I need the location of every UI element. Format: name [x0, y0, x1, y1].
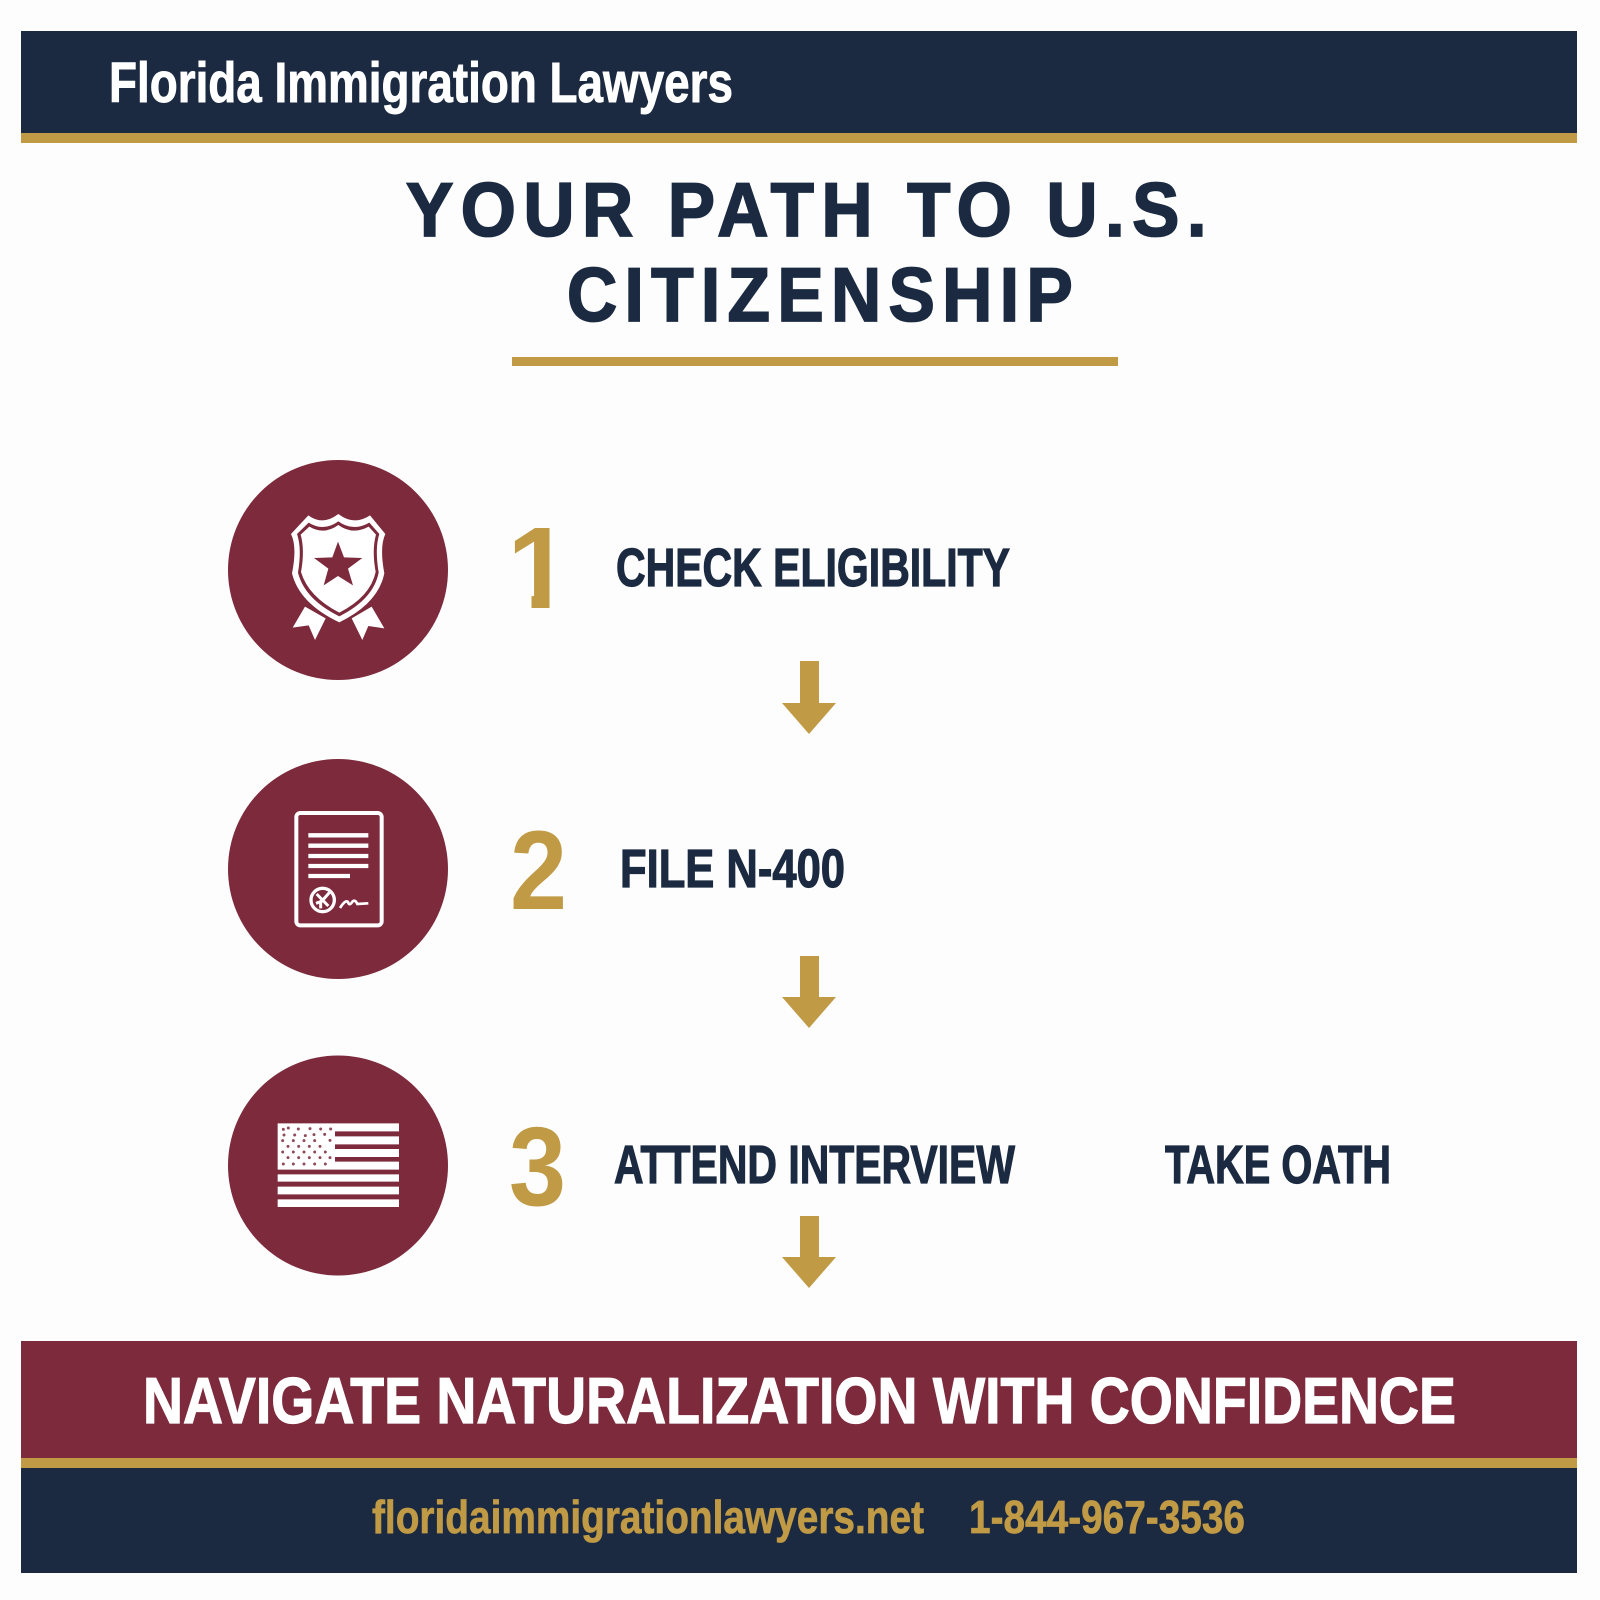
phone number: 1-844-967-3536 — [969, 1491, 1245, 1543]
title underline — [512, 357, 1118, 366]
arrow 3 — [782, 1216, 836, 1288]
step label: file n-400: FILE N-400 — [620, 839, 845, 899]
title — [406, 168, 1214, 338]
step 1: check eligibility — [228, 460, 1010, 680]
step number 1: 1 — [507, 503, 572, 633]
call to action banner — [21, 1341, 1577, 1468]
header banner — [21, 31, 1577, 143]
arrow 2 — [782, 956, 836, 1028]
step number 3: 3 — [509, 1104, 566, 1229]
title: YOUR PATH TO U.S. — [406, 168, 1214, 253]
header firm name: Florida Immigration Lawyers — [109, 51, 733, 115]
contact footer — [21, 1468, 1577, 1573]
step label: check eligibility: CHECK ELIGIBILITY — [616, 538, 1010, 598]
icon: shield badge with star — [228, 460, 448, 680]
arrow 1 — [782, 661, 836, 734]
title: CITIZENSHIP — [567, 253, 1080, 338]
step 3: attend interview and take oath — [228, 1056, 1391, 1276]
step 2: file n-400 — [228, 759, 845, 979]
icon: american flag — [228, 1056, 448, 1276]
step label: take oath: TAKE OATH — [1165, 1135, 1391, 1195]
step label: attend interview: ATTEND INTERVIEW — [614, 1135, 1015, 1195]
icon: signed document — [228, 759, 448, 979]
step number 2: 2 — [510, 808, 567, 933]
website: floridaimmigrationlawyers.net — [372, 1491, 924, 1543]
